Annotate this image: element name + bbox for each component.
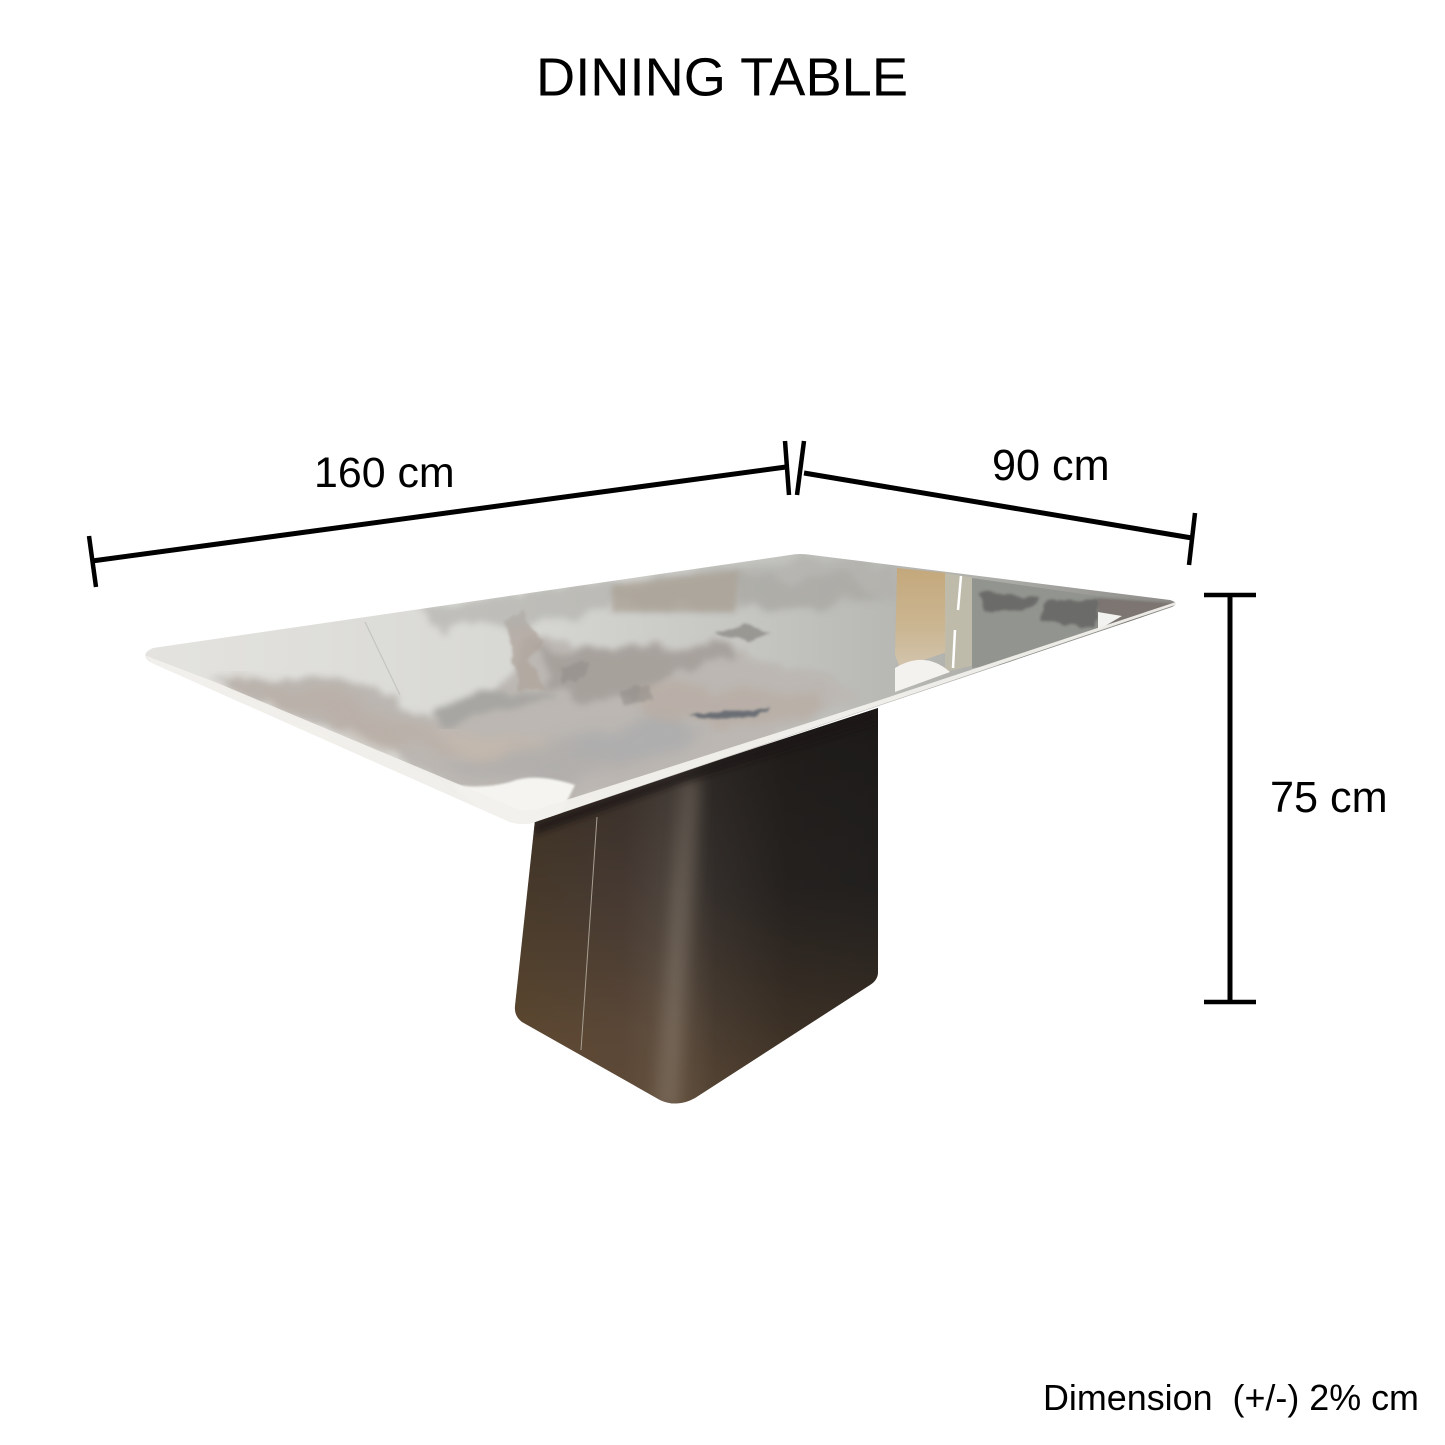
title: DINING TABLE [536,48,908,108]
upper grey band [420,558,895,630]
dimension: width 90 cm: 90 cm [992,442,1110,490]
warm reflection [895,568,947,668]
dimension: width 90 cm [797,441,1195,565]
front edge [144,600,1177,825]
white lower corner [460,776,576,822]
table illustration [144,554,1177,1110]
marble grey-brown lower region [210,640,860,808]
tolerance note: Dimension (+/-) 2% cm [1043,1378,1419,1418]
pedestal base [514,708,878,1104]
dark reflection on right [972,578,1177,668]
marble tabletop [144,554,1177,830]
dimension: length 160 cm: 160 cm [314,449,455,497]
glare line [953,576,961,668]
dimension: height 75 cm: 75 cm [1270,774,1388,822]
dimension: length 160 cm [89,441,789,587]
marble veins [505,612,545,692]
